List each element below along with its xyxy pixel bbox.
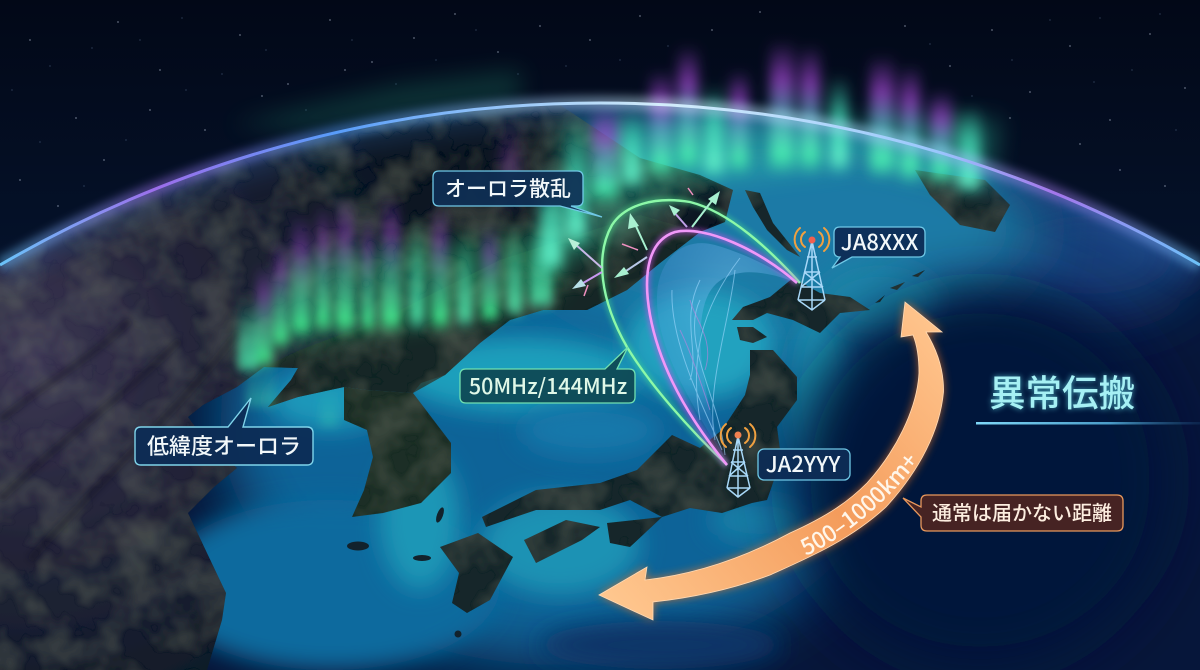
ocean glow (160, 120, 1200, 670)
label: 低緯度オーロラ: 低緯度オーロラ (147, 429, 301, 461)
propagation: magenta path (647, 231, 797, 465)
label: JA8XXX (832, 225, 925, 268)
aurora: northern curtain over the horizon (230, 40, 1000, 275)
label: オーロラ散乱: オーロラ散乱 (445, 173, 571, 203)
land: Jeju and Tsushima (347, 506, 462, 638)
propagation: blue scatter lobe (657, 243, 797, 460)
label: 50MHz/144MHz: 50MHz/144MHz (469, 370, 627, 401)
aurora: low-latitude band (238, 195, 560, 430)
propagation: green path (602, 200, 800, 465)
distance double arrow (596, 298, 950, 624)
scatter arrows (568, 188, 720, 296)
label: 通常は届かない距離 (903, 495, 1123, 531)
land: Korea (344, 383, 451, 517)
label: 低緯度オーロラ (135, 398, 313, 465)
label: JA2YYY: JA2YYY (766, 447, 841, 479)
title: 異常伝搬: 異常伝搬 (989, 364, 1135, 417)
label: 50MHz/144MHz (460, 347, 635, 403)
sparks (584, 188, 693, 296)
tower: JA8XXX (795, 228, 829, 310)
label: オーロラ散乱 (433, 171, 602, 217)
label: JA8XXX: JA8XXX (841, 225, 918, 257)
land: Japan and northern islands (440, 170, 1010, 613)
distance double arrow: 500–1000km+ (800, 456, 914, 554)
title: 異常伝搬 (976, 364, 1200, 424)
distance label (806, 462, 918, 556)
atmosphere haze inside the limb (0, 103, 1200, 265)
label: 通常は届かない距離: 通常は届かない距離 (932, 497, 1112, 526)
tower: JA2YYY (721, 424, 755, 497)
title: 異常伝搬: 異常伝搬 (989, 364, 1135, 417)
land: Asian mainland (0, 105, 733, 670)
mountain ridges (0, 320, 240, 560)
horizon glow (0, 103, 1200, 265)
